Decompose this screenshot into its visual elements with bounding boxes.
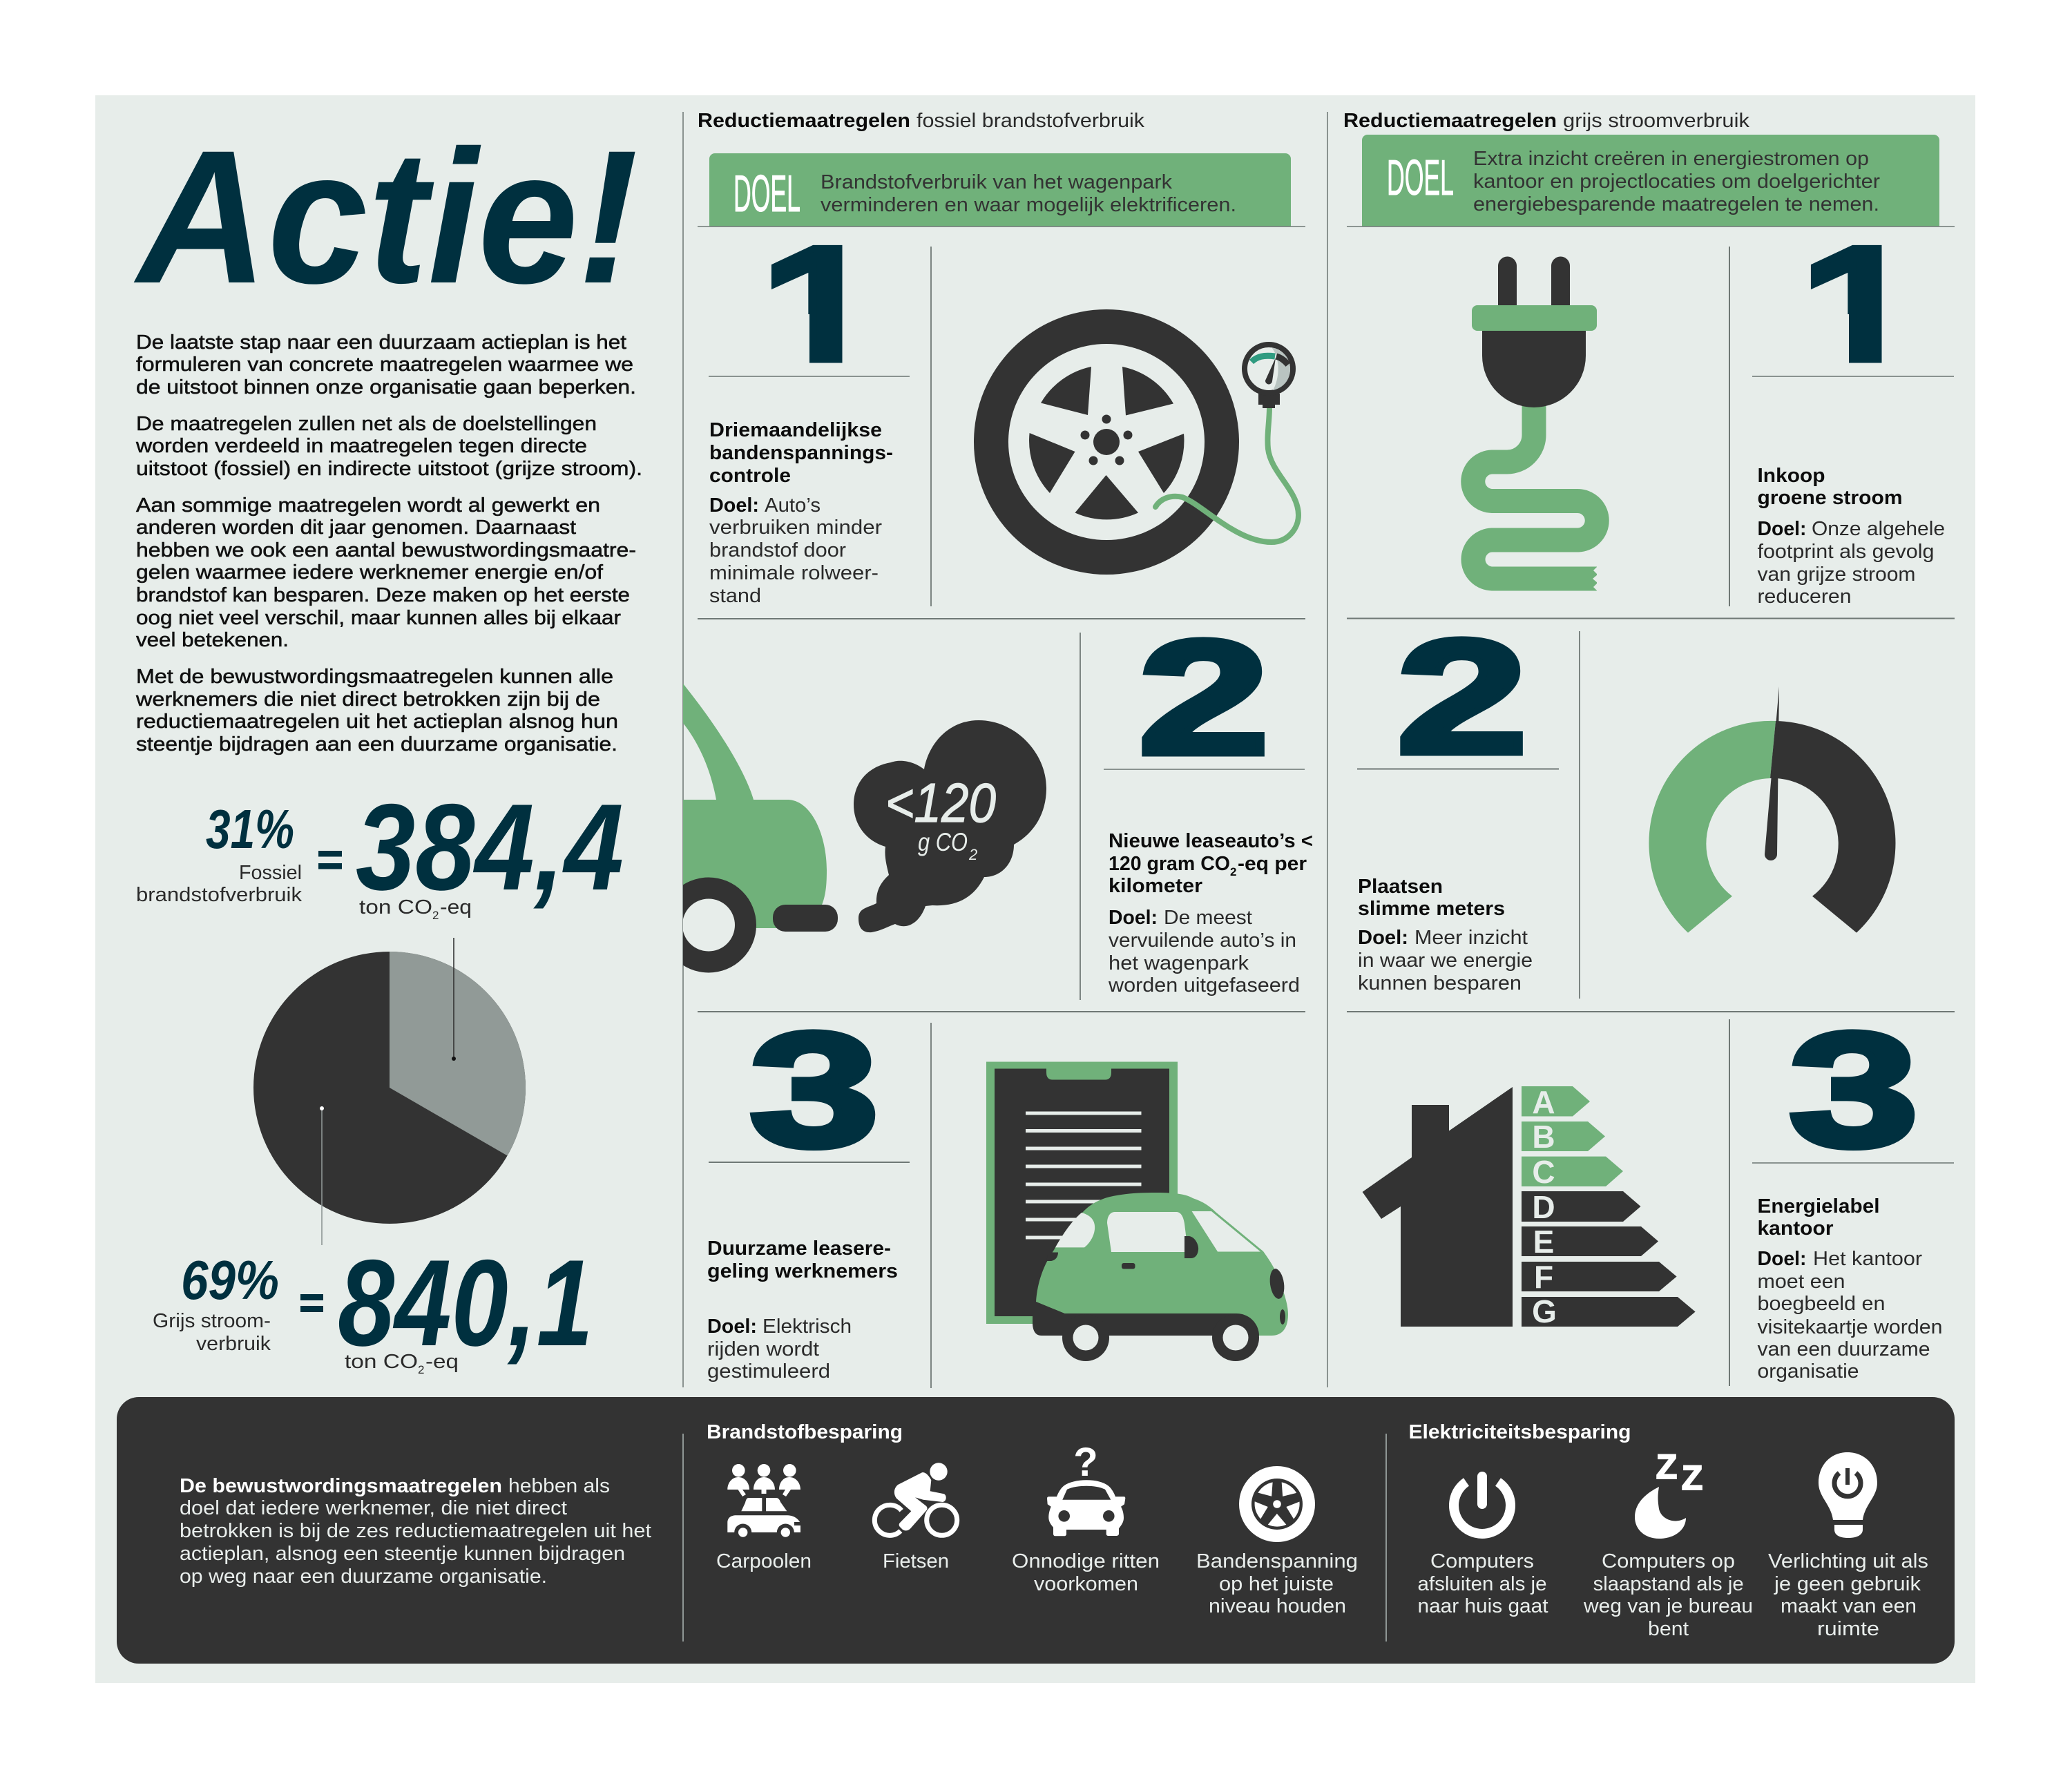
electricity measure 2: Meer inzicht xyxy=(1414,927,1528,949)
fossil measure 1: brandstof door xyxy=(709,539,846,561)
label: carpool: Carpoolen xyxy=(716,1550,812,1572)
electricity measure 3: Doel: xyxy=(1757,1248,1807,1270)
awareness intro text: doel dat iedere werknemer, die niet direct xyxy=(180,1497,567,1519)
intro text block: gelen waarmee iedere werknemer energie en/of xyxy=(136,561,604,584)
stat: fossil fuel 31%: Fossiel xyxy=(239,862,302,884)
goal box: electricity: DOEL xyxy=(1387,151,1454,206)
intro text block: uitstoot (fossiel) en indirecte uitstoot (grijze stroom). xyxy=(136,458,642,480)
electricity measure 1 xyxy=(1729,213,1954,608)
heading: electricity column: Reductiemaatregelen xyxy=(1343,110,1557,132)
fossil measure 3 xyxy=(707,999,931,1388)
heading: fuel saving: Brandstofbesparing xyxy=(707,1421,903,1443)
intro text block: Aan sommige maatregelen wordt al gewerkt en xyxy=(136,494,600,517)
intro text block: reductiemaatregelen uit het actieplan alsnog hun xyxy=(136,711,618,733)
intro text block: veel betekenen. xyxy=(136,629,289,651)
electricity measure 2 xyxy=(1357,606,1580,999)
awareness intro text: betrokken is bij de zes reductiemaatregelen uit het xyxy=(180,1520,651,1542)
electricity measure 2: 2 xyxy=(1397,606,1528,787)
stat: fossil fuel 31%: 2 xyxy=(432,909,439,922)
fossil measure 3: gestimuleerd xyxy=(707,1360,830,1383)
fossil measure 1: Driemaandelijkse xyxy=(709,419,882,441)
goal box: electricity: Extra inzicht creëren in energiestromen op xyxy=(1473,148,1869,170)
electricity measure 2: Plaatsen xyxy=(1358,876,1443,898)
icon: car rear with exhaust smoke xyxy=(661,684,1046,972)
icon: house with energy labels: G xyxy=(1532,1293,1557,1329)
electricity measure 3: visitekaartje worden xyxy=(1757,1316,1942,1338)
stat: fossil fuel 31%: ton CO xyxy=(359,896,432,918)
icon: house with energy labels: B xyxy=(1532,1119,1555,1155)
label: sleep mode: weg van je bureau xyxy=(1583,1595,1753,1617)
heading: fossil column xyxy=(698,110,1145,132)
awareness intro text: De bewustwordingsmaatregelen xyxy=(180,1475,502,1497)
icon: house with energy labels: A xyxy=(1532,1084,1555,1120)
electricity measure 1: van grijze stroom xyxy=(1757,564,1916,586)
icon: house with energy labels: E xyxy=(1533,1224,1554,1260)
icon: house with energy labels: C xyxy=(1532,1154,1555,1190)
icon: car rear with exhaust smoke: <120 xyxy=(885,772,996,834)
electricity measure 3: kantoor xyxy=(1757,1217,1833,1240)
fossil measure 1: Doel: xyxy=(709,494,759,517)
panel: awareness measures xyxy=(117,1397,1955,1664)
stat: grey electricity 69%: 69% xyxy=(181,1249,279,1311)
heading: electricity column xyxy=(1343,110,1750,132)
pie chart xyxy=(253,938,526,1245)
icon: tyre with pressure gauge xyxy=(974,309,1298,575)
stat: fossil fuel 31%: 31% xyxy=(206,798,294,860)
icon: smart meter gauge xyxy=(1649,686,1895,933)
fossil measure 2: worden uitgefaseerd xyxy=(1108,974,1300,997)
intro text block: oog niet veel verschil, maar kunnen alles bij elkaar xyxy=(136,607,621,629)
goal box: electricity xyxy=(1362,135,1939,227)
icon: sleep mode moon xyxy=(1635,1447,1702,1539)
label: tyre pressure: Bandenspanning xyxy=(1196,1550,1358,1572)
electricity measure 1: Inkoop xyxy=(1757,465,1825,487)
awareness intro text xyxy=(180,1475,651,1588)
icon: house with energy labels: D xyxy=(1532,1189,1555,1225)
label: lighting: maakt van een xyxy=(1781,1595,1917,1617)
electricity measure 1: 1 xyxy=(1800,213,1924,394)
awareness intro text: actieplan, alsnog een steentje kunnen bijdragen xyxy=(180,1543,625,1565)
label: lighting xyxy=(1768,1550,1928,1640)
awareness intro text: hebben als xyxy=(508,1475,610,1497)
icon: unnecessary trips xyxy=(1047,1440,1125,1536)
icon: house with energy labels: F xyxy=(1534,1259,1553,1295)
label: shut down computers xyxy=(1417,1550,1548,1617)
title: Actie! xyxy=(132,111,638,323)
label: sleep mode xyxy=(1583,1550,1753,1640)
label: tyre pressure: op het juiste xyxy=(1219,1573,1334,1595)
icon: sleep mode moon: Z xyxy=(1682,1459,1702,1497)
intro text block: worden verdeeld in maatregelen tegen directe xyxy=(135,435,587,457)
fossil measure 3: geling werknemers xyxy=(707,1260,898,1282)
intro text block: Met de bewustwordingsmaatregelen kunnen alle xyxy=(136,666,613,688)
fossil measure 2: -eq per xyxy=(1238,853,1307,875)
electricity measure 2: in waar we energie xyxy=(1358,950,1533,972)
label: unnecessary trips xyxy=(1012,1550,1160,1595)
intro text block: steentje bijdragen aan een duurzame organisatie. xyxy=(136,733,617,755)
intro text block xyxy=(135,331,642,755)
awareness intro text: op weg naar een duurzame organisatie. xyxy=(180,1566,547,1588)
stat: fossil fuel 31%: brandstofverbruik xyxy=(136,884,303,906)
fossil measure 3: Doel: xyxy=(707,1316,757,1338)
electricity measure 2: kunnen besparen xyxy=(1358,972,1522,994)
fossil measure 3: 3 xyxy=(749,999,879,1180)
intro text block: de uitstoot binnen onze organisatie gaan beperken. xyxy=(136,376,636,398)
stat: grey electricity 69%: -eq xyxy=(425,1351,459,1373)
label: tyre pressure: niveau houden xyxy=(1209,1595,1346,1617)
icon: tyre pressure xyxy=(1239,1466,1315,1542)
intro text block: brandstof kan besparen. Deze maken op het eerste xyxy=(136,584,630,606)
electricity measure 3 xyxy=(1729,999,1954,1386)
heading: fossil column: fossiel brandstofverbruik xyxy=(917,110,1145,132)
label: shut down computers: naar huis gaat xyxy=(1417,1595,1548,1617)
fossil measure 3: Elektrisch xyxy=(762,1316,852,1338)
intro text block: anderen worden dit jaar genomen. Daarnaast xyxy=(136,517,576,539)
fossil measure 2 xyxy=(1080,606,1313,1000)
label: shut down computers: afsluiten als je xyxy=(1417,1573,1547,1595)
fossil measure 3: Duurzame leasere- xyxy=(707,1238,891,1260)
icon: unnecessary trips: ? xyxy=(1073,1440,1098,1485)
label: unnecessary trips: Onnodige ritten xyxy=(1012,1550,1160,1572)
fossil measure 2: De meest xyxy=(1164,907,1252,929)
label: sleep mode: bent xyxy=(1648,1618,1689,1640)
icon: carpool xyxy=(727,1464,800,1541)
stat: grey electricity 69%: ton CO xyxy=(345,1351,418,1373)
goal box: fossil: Brandstofverbruik van het wagenpark xyxy=(821,171,1173,193)
icon: cycling xyxy=(874,1463,957,1535)
fossil measure 1: verbruiken minder xyxy=(709,517,882,539)
label: lighting: Verlichting uit als xyxy=(1768,1550,1928,1572)
intro text block: werknemers die niet direct betrokken zijn bij de xyxy=(135,689,600,711)
electricity measure 3: 3 xyxy=(1789,999,1919,1180)
stat: grey electricity 69%: 840,1 xyxy=(338,1234,593,1371)
fossil measure 1: controle xyxy=(709,465,791,487)
icon: clipboard with electric car xyxy=(986,1062,1288,1361)
icon: car rear with exhaust smoke: 2 xyxy=(968,846,977,863)
heading: electricity saving: Elektriciteitsbesparing xyxy=(1409,1421,1631,1443)
label: lighting: ruimte xyxy=(1817,1618,1879,1640)
intro text block: De maatregelen zullen net als de doelstellingen xyxy=(136,413,597,435)
icon: house with energy labels xyxy=(1363,1084,1696,1329)
electricity measure 1: Onze algehele xyxy=(1812,518,1945,540)
icon: plug with cord xyxy=(1472,257,1602,591)
label: sleep mode: slaapstand als je xyxy=(1593,1573,1744,1595)
icon: light bulb xyxy=(1819,1452,1877,1538)
electricity measure 3: boegbeeld en xyxy=(1757,1293,1886,1315)
icon: car rear with exhaust smoke: g CO xyxy=(918,828,968,856)
label: shut down computers: Computers xyxy=(1430,1550,1534,1572)
electricity measure 3: van een duurzame xyxy=(1757,1338,1930,1360)
fossil measure 2: vervuilende auto’s in xyxy=(1109,930,1296,952)
electricity measure 3: moet een xyxy=(1757,1271,1845,1293)
stat: fossil fuel 31%: -eq xyxy=(440,896,472,918)
stat: grey electricity 69%: verbruik xyxy=(196,1333,271,1355)
stat: fossil fuel 31%: 384,4 xyxy=(356,778,624,916)
heading: fossil column: Reductiemaatregelen xyxy=(698,110,910,132)
intro text block: hebben we ook een aantal bewustwordingsmaatre- xyxy=(136,539,636,561)
electricity measure 1: footprint als gevolg xyxy=(1757,541,1934,563)
label: cycling: Fietsen xyxy=(883,1550,949,1572)
label: sleep mode: Computers op xyxy=(1602,1550,1735,1572)
fossil measure 2: 2 xyxy=(1138,606,1269,788)
fossil measure 3: rijden wordt xyxy=(707,1338,819,1360)
label: lighting: je geen gebruik xyxy=(1774,1573,1921,1595)
fossil measure 2: Doel: xyxy=(1109,907,1158,929)
electricity measure 3: Het kantoor xyxy=(1813,1248,1922,1270)
goal box: fossil xyxy=(709,153,1291,227)
fossil measure 1: Auto’s xyxy=(765,494,821,517)
fossil measure 1: minimale rolweer- xyxy=(709,562,879,584)
electricity measure 1: groene stroom xyxy=(1757,487,1902,509)
icon: sleep mode moon: Z xyxy=(1656,1447,1677,1486)
fossil measure 2: 120 gram CO xyxy=(1109,853,1230,875)
heading: electricity column: grijs stroomverbruik xyxy=(1563,110,1750,132)
electricity measure 1: reduceren xyxy=(1757,586,1851,608)
goal box: electricity: energiebesparende maatregelen te nemen. xyxy=(1473,193,1879,215)
stat: fossil fuel 31% xyxy=(136,778,624,922)
stat: grey electricity 69% xyxy=(153,1234,593,1376)
fossil measure 2: Nieuwe leaseauto’s < xyxy=(1109,830,1313,852)
fossil measure 1: bandenspannings- xyxy=(709,442,893,464)
icon: power button xyxy=(1454,1476,1510,1534)
fossil measure 2: kilometer xyxy=(1109,875,1202,897)
fossil measure 1: stand xyxy=(709,585,761,607)
electricity measure 3: organisatie xyxy=(1757,1360,1859,1383)
intro text block: formuleren van concrete maatregelen waarmee we xyxy=(136,354,633,376)
intro text block: De laatste stap naar een duurzaam actieplan is het xyxy=(136,331,626,354)
fossil measure 2: 2 xyxy=(1230,865,1236,878)
electricity measure 2: Doel: xyxy=(1358,927,1408,949)
stat: grey electricity 69%: 2 xyxy=(418,1363,424,1376)
fossil measure 1: 1 xyxy=(760,213,885,394)
fossil measure 2: het wagenpark xyxy=(1109,952,1249,974)
goal box: fossil: DOEL xyxy=(733,164,800,222)
electricity measure 3: Energielabel xyxy=(1757,1195,1880,1217)
fossil measure 1 xyxy=(709,213,931,607)
goal box: fossil: verminderen en waar mogelijk elektrificeren. xyxy=(821,194,1236,216)
label: tyre pressure xyxy=(1196,1550,1358,1617)
stat: grey electricity 69%: Grijs stroom- xyxy=(153,1310,271,1332)
label: unnecessary trips: voorkomen xyxy=(1034,1573,1138,1595)
electricity measure 2: slimme meters xyxy=(1358,898,1505,920)
goal box: electricity: kantoor en projectlocaties om doelgerichter xyxy=(1473,171,1880,193)
electricity measure 1: Doel: xyxy=(1757,518,1807,540)
